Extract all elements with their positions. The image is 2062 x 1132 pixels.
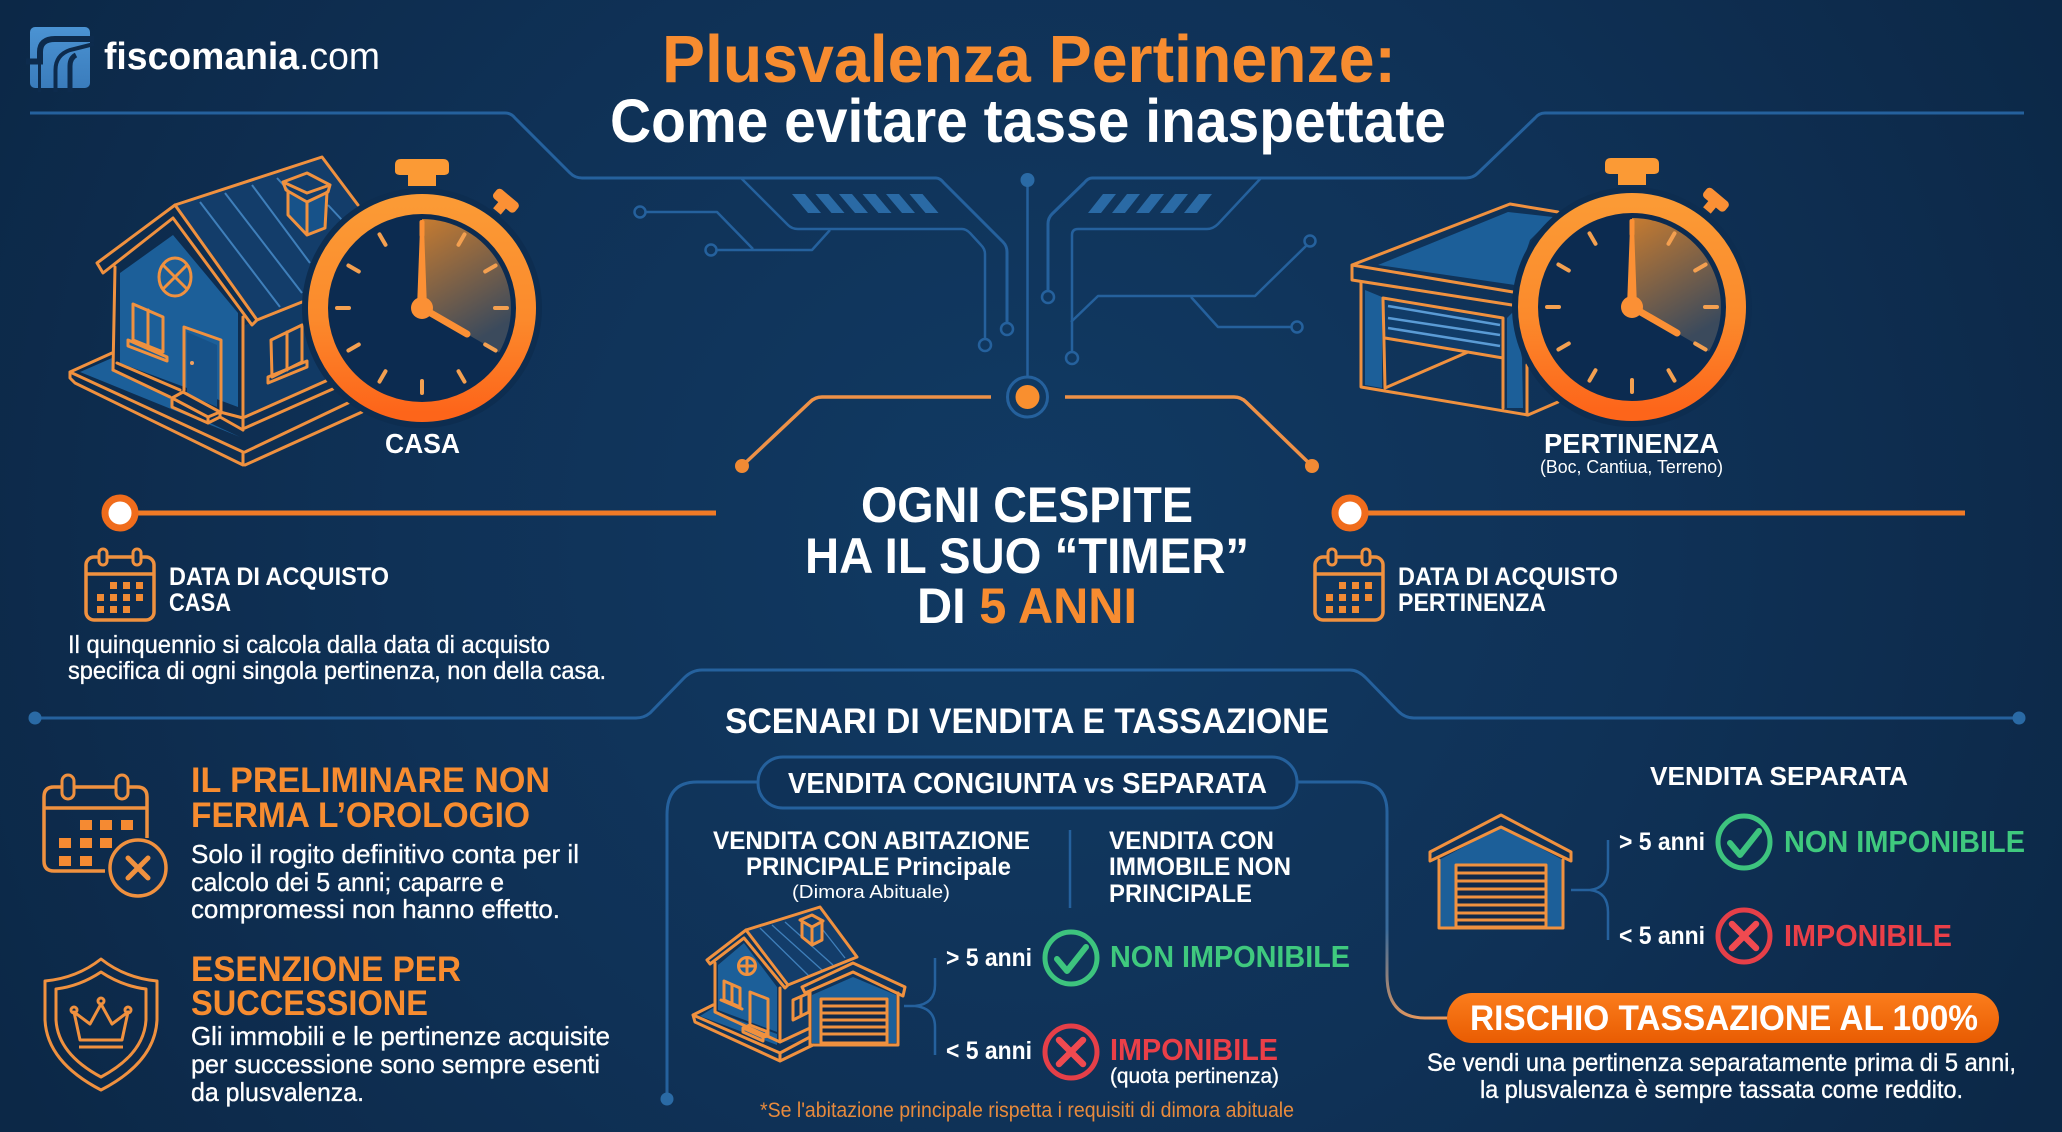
icon: cross [1718, 910, 1770, 962]
row: separate more than 5 years: NON IMPONIBILE [1784, 824, 2025, 859]
logo: fiscomania.com [26, 27, 380, 92]
icon: calendar with cross [44, 775, 166, 896]
icon: garage [1352, 204, 1558, 415]
row: separate more than 5 years: > 5 anni [1619, 828, 1705, 856]
timeline: casa [105, 498, 716, 528]
block: esenzione per successione: da plusvalenza. [191, 1077, 364, 1107]
block: il preliminare: FERMA L’OROLOGIO [191, 796, 530, 835]
column divider [1069, 830, 1071, 908]
title: Plusvalenza Pertinenze: [662, 22, 1396, 97]
icon: cross [1045, 1026, 1097, 1078]
label: data di acquisto casa: DATA DI ACQUISTO [169, 563, 389, 591]
label: data di acquisto pertinenza: PERTINENZA [1398, 589, 1546, 617]
text: quinquennio note: specifica di ogni singola pertinenza, non della casa. [68, 657, 606, 685]
pill: vendita congiunta vs separata: VENDITA CONGIUNTA vs SEPARATA [788, 768, 1267, 800]
panel: vendita con immobile non principale [1109, 827, 1291, 908]
central message [805, 477, 1249, 634]
panel: vendita con abitazione principale: PRINCIPALE Principale [746, 853, 1011, 881]
block: il preliminare [191, 761, 579, 924]
row: separate less than 5 years: IMPONIBILE [1784, 918, 1952, 953]
label: pertinenza types: (Boc, Cantiua, Terreno) [1540, 457, 1723, 477]
row: joint more than 5 years: NON IMPONIBILE [1110, 939, 1350, 974]
block: esenzione per successione [191, 950, 610, 1107]
icon: shield with crown [45, 959, 157, 1090]
icon: calendar pertinenza [1315, 549, 1383, 620]
wordmark: fiscomania.com [104, 36, 380, 78]
block: il preliminare: compromessi non hanno effetto. [191, 894, 560, 924]
panel: vendita con immobile non principale: IMMOBILE NON [1109, 853, 1291, 881]
block: il preliminare: calcolo dei 5 anni; caparre e [191, 867, 504, 897]
row: separate more than 5 years [1619, 816, 2025, 868]
central message: OGNI CESPITE [861, 477, 1193, 533]
block: esenzione per successione: ESENZIONE PER [191, 950, 461, 989]
callout: rischio tassazione: RISCHIO TASSAZIONE AL 100% [1470, 999, 1978, 1038]
panel: vendita con abitazione principale [713, 827, 1030, 902]
icon: stopwatch [302, 159, 542, 428]
icon: logo mark [26, 27, 94, 92]
block: esenzione per successione: Gli immobili e le pertinenze acquisite [191, 1021, 610, 1051]
icon: garage small [1430, 815, 1571, 928]
row: joint less than 5 years [946, 1026, 1279, 1088]
label: data di acquisto pertinenza [1398, 563, 1618, 617]
brace: separate sale [1571, 840, 1608, 940]
block: esenzione per successione: per successione sono sempre esenti [191, 1049, 600, 1079]
icon: check [1718, 816, 1770, 868]
row: separate less than 5 years: < 5 anni [1619, 922, 1705, 950]
row: joint less than 5 years: IMPONIBILE [1110, 1032, 1278, 1067]
central node with orange connectors [735, 377, 1319, 473]
label: data di acquisto casa [169, 563, 389, 617]
connector: to risk pill [1297, 782, 1447, 1018]
row: joint less than 5 years: < 5 anni [946, 1037, 1032, 1065]
heading: vendita separata: VENDITA SEPARATA [1650, 761, 1908, 791]
text: quinquennio note [68, 631, 606, 685]
row: joint less than 5 years: (quota pertinenza) [1110, 1065, 1279, 1088]
central message: HA IL SUO “TIMER” [805, 528, 1249, 584]
panel: vendita con abitazione principale: (Dimora Abituale) [792, 882, 950, 902]
icon: house with garage [693, 907, 905, 1061]
row: separate less than 5 years [1619, 910, 1952, 962]
block: esenzione per successione: SUCCESSIONE [191, 984, 428, 1023]
circuit lines [30, 113, 2024, 377]
icon: calendar casa [86, 549, 154, 620]
icon: stopwatch [1512, 158, 1752, 427]
footnote: *Se l'abitazione principale rispetta i requisiti di dimora abituale [760, 1099, 1294, 1122]
block: il preliminare: IL PRELIMINARE NON [191, 761, 550, 800]
illustration: garage with stopwatch [1352, 158, 1752, 477]
label: data di acquisto casa: CASA [169, 589, 231, 617]
illustration: house with stopwatch [70, 157, 542, 465]
brace: joint sale [904, 958, 935, 1055]
text: callout explanation: Se vendi una pertinenza separatamente prima di 5 anni, [1427, 1049, 2016, 1077]
panel: vendita con immobile non principale: VENDITA CON [1109, 827, 1274, 855]
heading: scenari: SCENARI DI VENDITA E TASSAZIONE [725, 702, 1329, 741]
label: data di acquisto pertinenza: DATA DI ACQUISTO [1398, 563, 1618, 591]
text: callout explanation [1427, 1049, 2016, 1104]
row: joint more than 5 years: > 5 anni [946, 944, 1032, 972]
timeline: pertinenza [1335, 498, 1965, 528]
icon: house [70, 157, 362, 465]
title: Come evitare tasse inaspettate [610, 87, 1446, 155]
row: joint more than 5 years [946, 932, 1350, 984]
panel: vendita con abitazione principale: VENDITA CON ABITAZIONE [713, 827, 1030, 855]
title [610, 22, 1446, 155]
panel: vendita con immobile non principale: PRINCIPALE [1109, 880, 1252, 908]
section divider [28, 670, 2026, 724]
label: casa: CASA [385, 428, 460, 459]
block: il preliminare: Solo il rogito definitivo conta per il [191, 839, 579, 869]
central message: DI 5 ANNI [917, 578, 1137, 634]
pill: vendita congiunta vs separata [758, 757, 1297, 808]
text: quinquennio note: Il quinquennio si calcola dalla data di acquisto [68, 631, 550, 659]
label: pertinenza: PERTINENZA [1544, 428, 1719, 459]
text: callout explanation: la plusvalenza è sempre tassata come reddito. [1480, 1076, 1963, 1104]
icon: check [1045, 932, 1097, 984]
connector: left bracket [660, 782, 758, 1106]
